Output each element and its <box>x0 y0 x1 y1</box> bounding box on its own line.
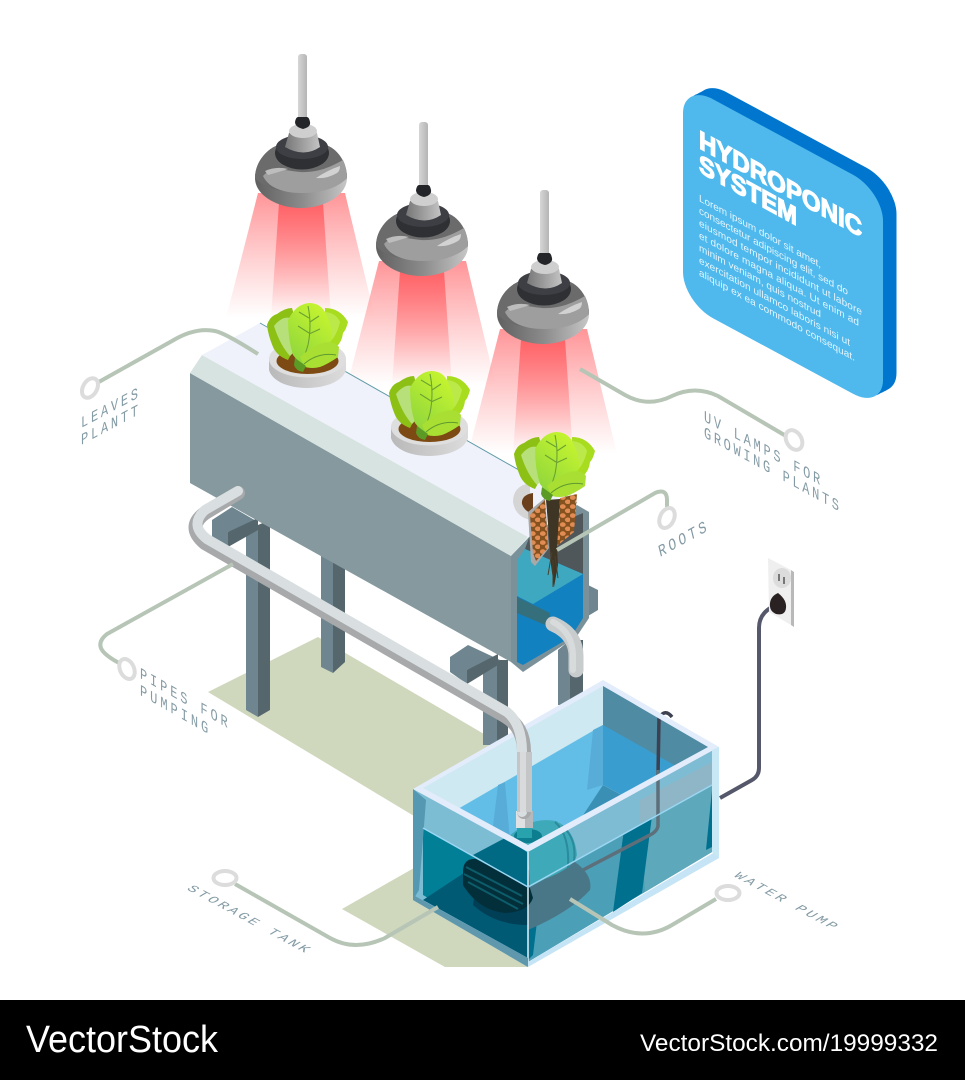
tank right face <box>528 785 712 962</box>
card title: SYSTEM <box>699 149 797 231</box>
card body text: et dolore magna aliqua. Ut enim ad <box>699 230 859 329</box>
label: roots: ROOTS <box>657 517 709 562</box>
card body text: eiusmod tempor incididunt ut labore <box>699 217 862 318</box>
label: pipes for pumping: PIPES FOR <box>140 666 228 733</box>
trough front face <box>190 373 511 662</box>
label: UV lamps for growing plants: UV LAMPS FOR <box>704 409 820 490</box>
pipe into pump <box>516 811 533 838</box>
footer url: VectorStock.com/19999332 <box>640 1030 938 1057</box>
submerged cord <box>583 770 658 870</box>
short elbow pipe from trough <box>553 622 576 670</box>
info card <box>683 76 896 410</box>
card body text: aliquip ex ea commodo consequat. <box>699 267 855 364</box>
cut-away water <box>517 549 583 665</box>
lamp 3 <box>497 190 589 344</box>
floor shadow: tank <box>342 868 540 967</box>
card body text: exercitation ullamco laboris nisi ut <box>699 255 850 349</box>
label: water pump: WATER PUMP <box>729 871 840 932</box>
storage tank <box>413 680 719 967</box>
floor shadow: table <box>208 637 520 830</box>
lettuce 2 <box>389 371 470 440</box>
card body text: minim veniam, quis nostrud <box>699 242 821 321</box>
lettuce 1 <box>267 303 348 372</box>
leader: leaves <box>79 330 258 401</box>
card body text <box>699 193 862 368</box>
pump teal housing <box>507 820 577 887</box>
socket plate <box>791 570 794 627</box>
leader: UV lamps <box>580 369 806 453</box>
table legs and crossbars <box>212 507 598 745</box>
tank rim <box>413 680 719 852</box>
leader: water pump <box>570 886 740 934</box>
card body text: consectetur adipiscing elit, sed do <box>699 205 848 298</box>
cut-away water surface <box>517 549 583 604</box>
power cord inside tank <box>658 713 672 775</box>
lamp 1 <box>255 54 347 208</box>
lamp 2 <box>376 122 468 276</box>
pump shadow <box>473 870 528 925</box>
trough top <box>202 323 577 537</box>
card title: HYDROPONIC <box>699 125 862 243</box>
lettuce 3 <box>514 432 595 501</box>
tank right face above water <box>528 747 719 887</box>
tank left face <box>413 789 528 967</box>
main pumping pipe <box>196 491 532 812</box>
card body text: Lorem ipsum dolor sit amet, <box>699 193 821 271</box>
trough lip <box>190 355 528 556</box>
plug <box>770 593 786 614</box>
tank back walls above water <box>416 683 603 812</box>
leader: pipes <box>100 564 233 681</box>
light beams <box>226 193 617 454</box>
pump dark shell <box>473 838 528 887</box>
leader: roots <box>557 492 678 550</box>
cut pot with clay pebbles and roots <box>513 483 577 587</box>
pot 1 <box>269 340 346 388</box>
pump fins <box>463 859 533 913</box>
trough cut-away frame <box>511 505 589 672</box>
pot 2 <box>391 408 468 456</box>
cut-away back wall <box>525 513 583 575</box>
card side <box>687 76 896 408</box>
hydroponic trough <box>190 323 589 672</box>
label: pipes for pumping: PUMPING <box>140 683 208 739</box>
cord <box>720 607 772 798</box>
inner pipe <box>517 597 550 627</box>
label: storage tank: STORAGE TANK <box>182 884 313 955</box>
tank glass edges <box>527 852 529 967</box>
footer brand: VectorStock <box>26 1019 219 1061</box>
label: leaves plantt: PLANTT <box>81 403 138 450</box>
tank water back <box>425 725 603 887</box>
label: leaves plantt: LEAVES <box>81 386 138 433</box>
card face <box>683 83 883 410</box>
footer bar <box>0 1000 965 1080</box>
wall socket with plug and cord <box>720 558 794 798</box>
label: UV lamps for growing plants: GROWING PLANTS <box>704 425 839 517</box>
leader: storage tank <box>214 871 438 945</box>
water pump <box>463 820 577 913</box>
